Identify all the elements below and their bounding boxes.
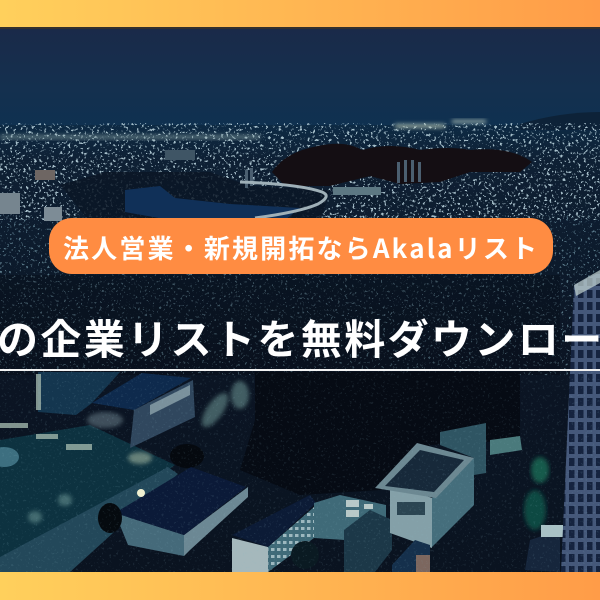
city lights far <box>0 123 600 220</box>
riverside block <box>333 187 381 195</box>
trees bright <box>28 381 249 523</box>
dark tree <box>98 503 122 533</box>
fine lower lights <box>0 372 600 572</box>
ellipse pad <box>0 447 19 467</box>
center tree <box>170 444 204 468</box>
street star <box>137 489 145 497</box>
front block <box>392 540 430 572</box>
highway curve <box>240 182 326 218</box>
hills <box>272 144 532 186</box>
night sky <box>0 29 600 125</box>
hillside buildings <box>245 160 421 188</box>
back wing <box>440 423 486 475</box>
band edge shadow <box>0 27 600 29</box>
roof B building <box>232 495 316 572</box>
distant mountain <box>520 112 600 130</box>
orange glow <box>416 555 430 572</box>
roof A building <box>115 467 248 556</box>
road <box>0 467 178 572</box>
tower top face <box>574 270 600 296</box>
dark riverside <box>60 172 330 222</box>
horizon glow <box>0 120 486 139</box>
city base <box>0 125 600 572</box>
tall left building <box>38 372 120 415</box>
lit row left <box>0 374 92 450</box>
connecting block <box>314 495 386 545</box>
tower <box>561 272 600 572</box>
city lights near <box>0 215 600 375</box>
right courtyard <box>490 436 563 572</box>
small roof <box>344 510 392 572</box>
windows connecting block <box>346 500 373 517</box>
heading underline <box>0 369 600 371</box>
ground left <box>0 425 175 570</box>
center dark block <box>240 372 520 495</box>
building D <box>375 443 474 548</box>
left top building <box>87 373 195 448</box>
left buildings far <box>0 150 195 221</box>
pill text: 法人営業・新規開拓ならAkalaリスト <box>63 229 537 266</box>
river <box>125 186 300 220</box>
parked cars <box>291 541 309 555</box>
pill background <box>49 218 553 274</box>
lower city darkness <box>0 275 560 375</box>
pill banner <box>49 218 553 274</box>
